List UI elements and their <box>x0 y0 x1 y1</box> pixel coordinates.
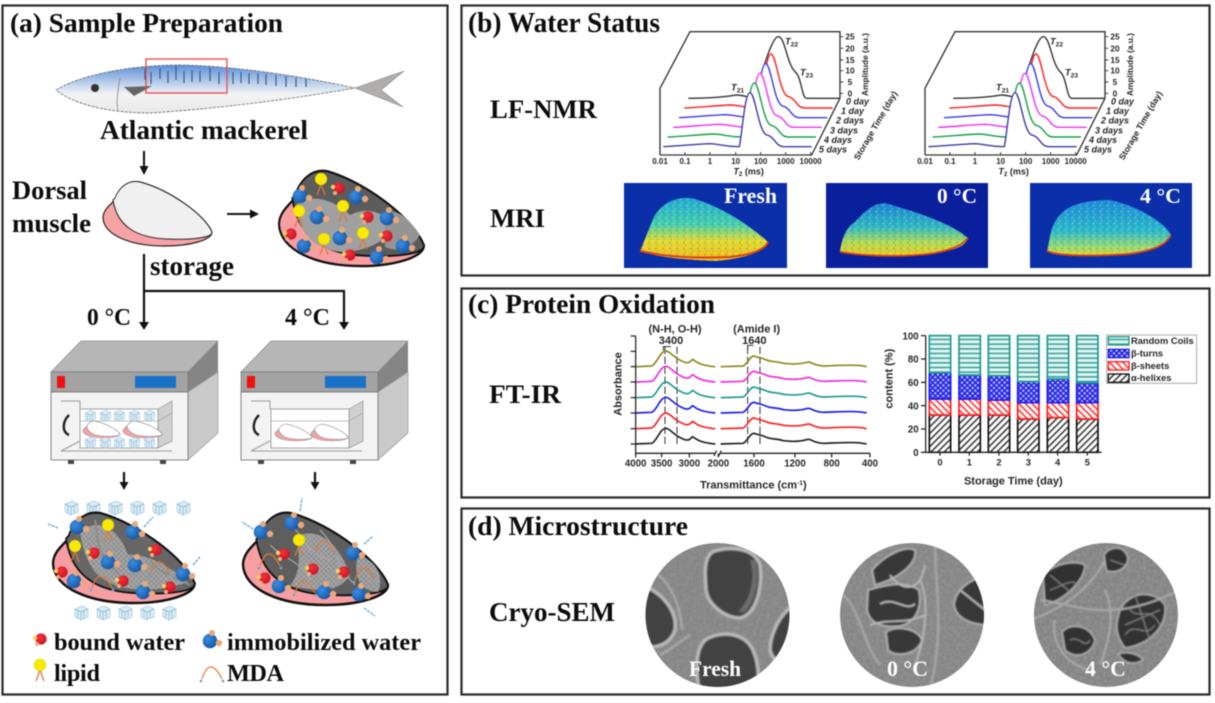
chart: protein secondary structure stacked bars <box>884 331 1197 487</box>
chart: protein secondary structure stacked bars: content (%) <box>884 348 896 409</box>
heading: protein oxidation: (c) Protein Oxidation <box>468 289 715 319</box>
panel: (a) sample preparation <box>2 6 448 694</box>
label: 0 °C: 0 °C <box>87 305 131 331</box>
label: MRI: MRI <box>490 203 545 233</box>
icon: Atlantic mackerel fish <box>56 59 404 113</box>
image: MRI 4 °C: 4 °C <box>1140 184 1181 208</box>
chart: protein secondary structure stacked bars: α-helixes <box>1131 373 1171 383</box>
image: MRI 0 °C <box>826 183 988 268</box>
chart: FT-IR spectra: 4000 <box>625 459 646 470</box>
icon: plain dorsal muscle <box>103 182 212 246</box>
chart: FT-IR spectra: 800 <box>824 459 840 470</box>
chart: protein secondary structure stacked bars: 3 <box>1026 458 1031 468</box>
legend: molecules: lipid <box>54 660 100 687</box>
chart: FT-IR spectra: (Amide I) <box>733 324 780 336</box>
chart: FT-IR spectra: -1 <box>797 480 803 487</box>
chart: FT-IR spectra: 1600 <box>743 459 765 470</box>
image: SEM 4 °C <box>1030 540 1185 690</box>
label: Cryo-SEM: Cryo-SEM <box>489 597 615 627</box>
image: SEM 0 °C: 0 °C <box>887 656 928 681</box>
icon: 0 °C storage chamber with ice <box>51 341 218 464</box>
chart: protein secondary structure stacked bars: Storage Time (day) <box>964 475 1063 487</box>
chart: protein secondary structure stacked bars: 5 <box>1085 458 1090 468</box>
label: storage: storage <box>150 251 234 281</box>
arrow: chamber 0 °C to result <box>120 472 128 490</box>
chart: protein secondary structure stacked bars: 2 <box>996 458 1002 468</box>
arrow: muscle to detail <box>227 210 259 218</box>
legend: molecules <box>33 629 421 687</box>
icon: 4 °C storage chamber <box>241 341 408 464</box>
arrow: chamber 4 °C to result <box>310 472 320 490</box>
chart: protein secondary structure stacked bars: 0 <box>937 458 943 468</box>
icon: muscle after 4 °C storage <box>242 498 388 616</box>
panel: (d) microstructure <box>462 508 1210 695</box>
chart: FT-IR spectra: 3500 <box>651 459 672 470</box>
legend: molecules: immobilized water <box>227 629 421 656</box>
label: Dorsal muscle: muscle <box>12 208 91 238</box>
label: Dorsal muscle <box>12 175 91 238</box>
chart: protein secondary structure stacked bars: 4 <box>1055 458 1061 468</box>
chart: protein secondary structure stacked bars: 1 <box>967 458 972 468</box>
chart: FT-IR spectra: (N-H, O-H) <box>648 324 702 336</box>
chart: protein secondary structure stacked bars: 60 <box>908 378 919 389</box>
label: Atlantic mackerel: Atlantic mackerel <box>100 115 308 145</box>
label: 4 °C: 4 °C <box>285 305 330 331</box>
label: LF-NMR: LF-NMR <box>490 94 598 124</box>
image: SEM fresh <box>644 542 790 688</box>
arrow: storage split to 0 °C and 4 °C <box>139 254 349 330</box>
image: MRI fresh <box>624 183 787 268</box>
heading: sample preparation: (a) Sample Preparation <box>10 8 283 38</box>
chart: protein secondary structure stacked bars: 20 <box>908 425 919 436</box>
chart: FT-IR spectra: 2000 <box>708 459 729 470</box>
chart: protein secondary structure stacked bars: 0 <box>913 448 919 459</box>
chart: protein secondary structure stacked bars: 80 <box>908 355 919 366</box>
chart: LF-NMR 4 °C waterfall <box>917 32 1164 178</box>
panel: (c) protein oxidation <box>462 288 1210 498</box>
chart: protein secondary structure stacked bars: 100 <box>903 331 919 342</box>
image: MRI 4 °C <box>1030 183 1192 268</box>
chart: protein secondary structure stacked bars: β-sheets <box>1131 361 1169 371</box>
label: Dorsal muscle: Dorsal <box>12 175 87 205</box>
chart: FT-IR spectra: ) <box>803 479 807 491</box>
chart: FT-IR spectra: 1640 <box>742 335 767 347</box>
label: FT-IR: FT-IR <box>489 379 562 409</box>
chart: protein secondary structure stacked bars: Random Coils <box>1131 336 1194 346</box>
legend: molecules: bound water <box>54 629 185 656</box>
chart: FT-IR spectra: 3000 <box>679 459 700 470</box>
heading: water status: (b) Water Status <box>468 8 660 39</box>
panel: (b) water status <box>462 6 1210 276</box>
image: MRI fresh: Fresh <box>724 184 777 208</box>
chart: LF-NMR 0 °C waterfall <box>652 32 899 178</box>
chart: FT-IR spectra: Absorbance <box>613 352 625 416</box>
icon: fresh muscle molecular detail <box>279 171 424 266</box>
legend: molecules: MDA <box>227 660 284 687</box>
chart: FT-IR spectra: 400 <box>862 459 878 470</box>
chart: FT-IR spectra <box>613 324 878 491</box>
chart: protein secondary structure stacked bars: 40 <box>908 401 919 412</box>
image: SEM 4 °C: 4 °C <box>1085 656 1126 681</box>
image: SEM 0 °C <box>835 540 990 690</box>
image: MRI 0 °C: 0 °C <box>937 184 977 208</box>
icon: muscle after 0 °C storage <box>48 501 200 620</box>
arrow: fish to muscle <box>140 151 148 175</box>
chart: protein secondary structure stacked bars: β-turns <box>1131 349 1163 359</box>
chart: FT-IR spectra: 1200 <box>784 459 806 470</box>
chart: FT-IR spectra: Transmittance (cm <box>700 479 797 491</box>
chart: FT-IR spectra: 3400 <box>659 335 683 347</box>
heading: microstructure: (d) Microstructure <box>468 511 688 541</box>
image: SEM fresh: Fresh <box>689 656 741 681</box>
